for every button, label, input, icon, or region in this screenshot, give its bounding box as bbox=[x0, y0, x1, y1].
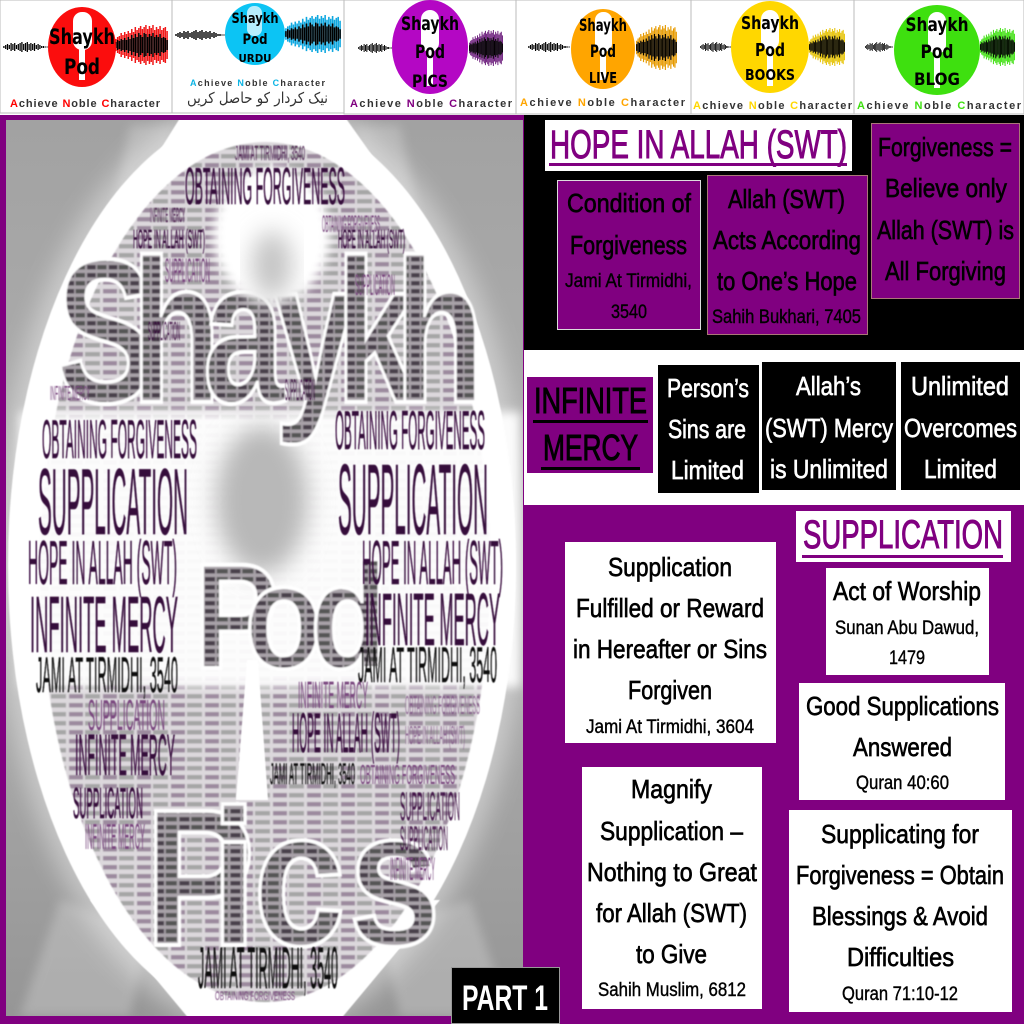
heading: infinite mercy: INFINITE bbox=[534, 380, 647, 421]
white glow circle bbox=[0, 95, 528, 1024]
word cloud words: SUPPLICATION bbox=[165, 252, 210, 290]
card: forgiveness belief bbox=[872, 124, 1020, 298]
card: unlimited overcomes limited: Limited bbox=[924, 454, 997, 484]
card: Allah acts according to hope: to One’s Hope bbox=[717, 266, 857, 296]
card: Allah acts according to hope: Acts According bbox=[713, 225, 861, 255]
card: unlimited overcomes limited: Unlimited bbox=[911, 371, 1009, 401]
word cloud words: JAMI AT TIRMIDHI, 3540 bbox=[235, 143, 305, 165]
word cloud words: OBTAINING FORGIVENESS bbox=[215, 989, 295, 1003]
panel: hope in Allah bbox=[524, 115, 1024, 350]
card: supplicating for forgiveness: Quran 71:10-12 bbox=[842, 984, 958, 1005]
logo: Shaykh Pod Blog: Shaykh bbox=[906, 14, 968, 36]
word cloud words: SUPPLICATION bbox=[148, 316, 180, 346]
logo: Shaykh Pod Live bbox=[516, 0, 691, 114]
logo: Shaykh Pod Live: Shaykh bbox=[579, 16, 627, 36]
logo: Shaykh Pod Pics: Pod bbox=[415, 41, 445, 63]
card: mercy unlimited bbox=[762, 362, 896, 490]
word cloud words: SUPPLICATION bbox=[88, 691, 165, 740]
logo: Shaykh Pod Pics bbox=[344, 0, 516, 114]
card: condition of forgiveness: 3540 bbox=[611, 302, 647, 323]
card: supplication fulfilled: Jami At Tirmidhi, 3604 bbox=[586, 717, 754, 738]
logo: Shaykh Pod Pics: Achieve Noble Character bbox=[350, 98, 513, 110]
logo: Shaykh Pod Pics: Shaykh bbox=[401, 13, 459, 35]
card: act of worship: Sunan Abu Dawud, bbox=[835, 618, 979, 639]
cloud texture bbox=[20, 142, 520, 1002]
logo: Shaykh Pod Books: Pod bbox=[755, 40, 785, 61]
card: magnify supplication: Magnify bbox=[631, 774, 712, 804]
card: act of worship bbox=[826, 568, 989, 675]
panel: supplication bbox=[524, 505, 1024, 1024]
logo: Shaykh Pod Urdu: Shaykh bbox=[232, 11, 278, 27]
card: supplication fulfilled: in Hereafter or Sins bbox=[573, 634, 767, 664]
logo: Shaykh Pod Urdu: Achieve Noble Character bbox=[190, 78, 325, 88]
card: supplicating for forgiveness bbox=[789, 810, 1012, 1012]
word cloud image panel bbox=[0, 95, 528, 1024]
logo: Shaykh Pod Urdu bbox=[172, 0, 344, 113]
card: condition of forgiveness bbox=[558, 180, 700, 330]
card: magnify supplication: to Give bbox=[636, 939, 707, 969]
logo: Shaykh Pod: Achieve Noble Character bbox=[10, 98, 161, 110]
card: condition of forgiveness: Forgiveness bbox=[570, 230, 687, 260]
card: unlimited overcomes limited bbox=[901, 362, 1020, 490]
logo strip bbox=[0, 0, 1024, 115]
logo: Shaykh Pod Blog: Pod bbox=[920, 41, 954, 63]
card: Allah acts according to hope: Sahih Bukhari, 7405 bbox=[712, 307, 861, 328]
logo: Shaykh Pod Books: Shaykh bbox=[741, 13, 799, 34]
card: supplication fulfilled bbox=[565, 542, 776, 743]
card: mercy unlimited: (SWT) Mercy bbox=[765, 413, 893, 443]
logo: Shaykh Pod bbox=[0, 0, 172, 113]
word cloud words: SUPPLICATION bbox=[285, 374, 315, 407]
logo: Shaykh Pod Live: Pod bbox=[590, 42, 616, 62]
card: sins limited: Limited bbox=[671, 455, 744, 485]
part label bbox=[452, 968, 560, 1024]
card: Allah acts according to hope: Allah (SWT) bbox=[728, 184, 845, 214]
card: forgiveness belief: All Forgiving bbox=[885, 256, 1006, 286]
card: magnify supplication: Supplication – bbox=[600, 816, 743, 846]
card: act of worship: Act of Worship bbox=[833, 576, 981, 606]
logo: Shaykh Pod Urdu: نیک کردار کو حاصل کریں bbox=[187, 89, 328, 107]
card: magnify supplication bbox=[582, 767, 762, 1009]
word cloud words: SUPPLICATION bbox=[73, 779, 143, 828]
heading: hope in Allah bbox=[545, 120, 852, 171]
part label: PART 1 bbox=[462, 979, 548, 1018]
card: sins limited: Sins are bbox=[668, 414, 746, 444]
logo: Shaykh Pod Urdu: Pod bbox=[242, 32, 268, 48]
card: act of worship: 1479 bbox=[889, 648, 925, 669]
heading: infinite mercy bbox=[527, 377, 653, 473]
card: supplication fulfilled: Supplication bbox=[608, 552, 732, 582]
logo: Shaykh Pod Books bbox=[691, 0, 854, 114]
logo: Shaykh Pod Pics: PICS bbox=[412, 72, 448, 92]
card: magnify supplication: Sahih Muslim, 6812 bbox=[598, 980, 746, 1001]
logo: Shaykh Pod: Pod bbox=[64, 55, 100, 79]
logo: Shaykh Pod Books: BOOKS bbox=[745, 66, 795, 84]
card: sins limited: Person’s bbox=[667, 373, 749, 403]
logo: Shaykh Pod Books: Achieve Noble Character bbox=[693, 100, 853, 112]
card: supplicating for forgiveness: Supplicating for bbox=[821, 819, 979, 849]
logo: Shaykh Pod Live: Achieve Noble Character bbox=[520, 97, 686, 109]
card: supplicating for forgiveness: Blessings & Avoid bbox=[812, 901, 988, 931]
card: condition of forgiveness: Jami At Tirmidhi, bbox=[565, 271, 692, 292]
card: good supplications answered: Quran 40:60 bbox=[856, 773, 949, 794]
logo: Shaykh Pod Blog: BLOG bbox=[914, 70, 960, 90]
logo: Shaykh Pod Blog: Achieve Noble Character bbox=[857, 100, 1022, 112]
card: magnify supplication: Nothing to Great bbox=[587, 857, 758, 887]
card: mercy unlimited: is Unlimited bbox=[770, 454, 888, 484]
word cloud words: INFINITE MERCY bbox=[150, 205, 185, 227]
central mic shading bbox=[216, 426, 308, 574]
word cloud words: INFINITE MERCY bbox=[85, 816, 145, 857]
card: sins limited bbox=[658, 365, 759, 493]
card: supplication fulfilled: Fulfilled or Reward bbox=[576, 593, 764, 623]
large lettering: Pod: Pod bbox=[194, 533, 388, 700]
card: good supplications answered: Answered bbox=[853, 732, 952, 762]
microphone silhouette bbox=[214, 167, 330, 800]
heading: hope in Allah: HOPE IN ALLAH (SWT) bbox=[550, 123, 847, 167]
word cloud words: HOPE IN ALLAH (SWT) bbox=[133, 224, 205, 254]
large lettering: Pics: Pics bbox=[145, 769, 441, 987]
logo: Shaykh Pod: Shaykh bbox=[49, 25, 115, 49]
card: good supplications answered bbox=[799, 683, 1005, 800]
panel: infinite mercy bbox=[524, 350, 1024, 505]
card: supplicating for forgiveness: Difficulties bbox=[847, 942, 954, 972]
card: supplication fulfilled: Forgiven bbox=[628, 675, 712, 705]
card: magnify supplication: for Allah (SWT) bbox=[596, 898, 747, 928]
large lettering: Shaykh: Shaykh bbox=[56, 216, 485, 446]
heading: infinite mercy: MERCY bbox=[543, 427, 638, 468]
word cloud words: INFINITE MERCY bbox=[50, 383, 90, 405]
logo: Shaykh Pod Blog bbox=[854, 0, 1024, 114]
word cloud words bbox=[28, 143, 503, 1003]
logo: Shaykh Pod Live: LIVE bbox=[589, 69, 617, 87]
card: Allah acts according to hope bbox=[708, 176, 868, 334]
card: condition of forgiveness: Condition of bbox=[567, 188, 692, 218]
card: mercy unlimited: Allah’s bbox=[796, 371, 861, 401]
card: forgiveness belief: Believe only bbox=[885, 173, 1007, 203]
logo: Shaykh Pod Urdu: URDU bbox=[238, 52, 272, 65]
